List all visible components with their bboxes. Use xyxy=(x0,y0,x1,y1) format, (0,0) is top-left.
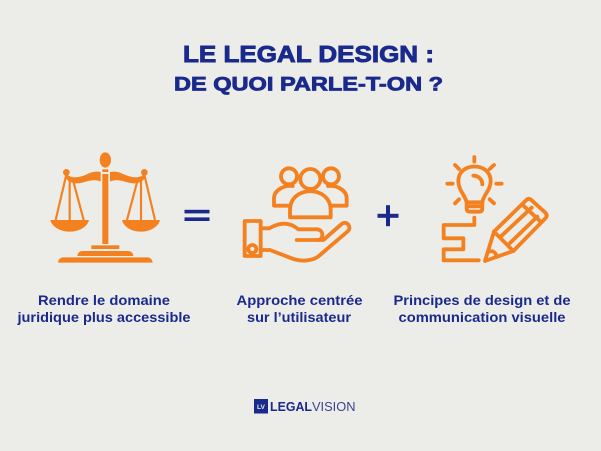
icon: light bulb and pencil xyxy=(444,157,547,261)
logo: LegalVision: VISION xyxy=(312,399,356,414)
icon: people in a hand xyxy=(245,168,349,261)
caption: accessible law: Rendre le domaine xyxy=(38,292,170,308)
title xyxy=(174,41,443,96)
caption: design principles xyxy=(394,292,571,325)
title: LE LEGAL DESIGN : xyxy=(183,41,434,67)
caption: user-centred approach xyxy=(236,292,363,325)
logo: LegalVision xyxy=(254,399,356,414)
title: DE QUOI PARLE-T-ON ? xyxy=(174,74,443,96)
caption: design principles: communication visuelle xyxy=(398,309,566,325)
icon: scales of justice xyxy=(50,152,160,263)
plus sign xyxy=(378,205,398,226)
logo: LegalVision: LEGAL xyxy=(270,399,312,414)
equals sign xyxy=(184,210,210,221)
logo: LegalVision: LV xyxy=(257,405,265,411)
caption: accessible law xyxy=(16,292,191,325)
caption: design principles: Principes de design et de xyxy=(394,292,571,308)
caption: user-centred approach: sur l’utilisateur xyxy=(247,309,352,325)
caption: user-centred approach: Approche centrée xyxy=(236,292,363,308)
caption: accessible law: juridique plus accessible xyxy=(16,309,191,325)
